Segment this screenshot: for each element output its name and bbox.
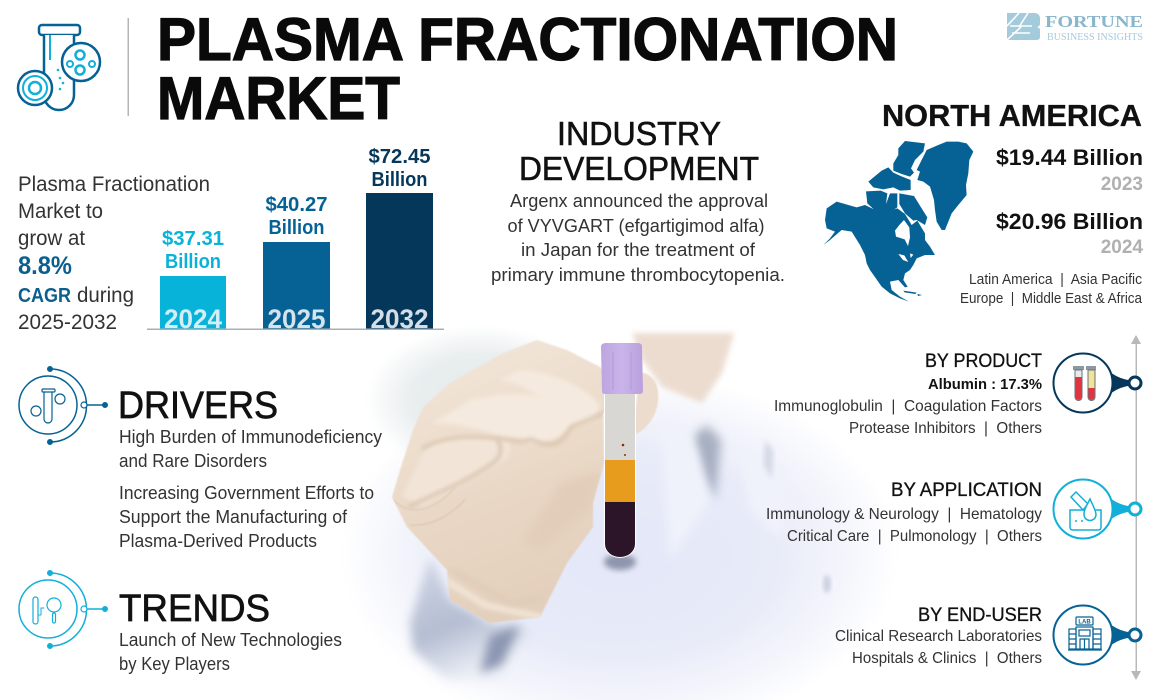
bar 2025: $40.27 bbox=[266, 194, 328, 216]
north america heading and values: NORTH AMERICA bbox=[882, 98, 1142, 133]
by end-user text: Hospitals & Clinics | Others bbox=[852, 650, 1042, 667]
by product text: BY PRODUCT bbox=[925, 351, 1042, 372]
header divider bbox=[128, 18, 129, 116]
bar 2032 bbox=[366, 146, 433, 334]
growth text block: Market to bbox=[18, 200, 103, 223]
by product text bbox=[774, 351, 1042, 437]
by application text: BY APPLICATION bbox=[891, 480, 1042, 501]
growth text block: during bbox=[77, 284, 134, 307]
drivers text bbox=[119, 427, 382, 551]
industry development: Argenx announced the approval bbox=[510, 191, 768, 211]
by product text: Immunoglobulin | Coagulation Factors bbox=[774, 398, 1042, 415]
growth text block: CAGR bbox=[18, 285, 71, 307]
by end-user text: BY END-USER bbox=[918, 605, 1042, 626]
north america heading and values bbox=[882, 98, 1143, 307]
north america heading and values: Latin America | Asia Pacific bbox=[969, 272, 1142, 288]
trends text bbox=[119, 630, 342, 674]
logo: Fortune Business Insights: FORTUNE bbox=[1045, 12, 1143, 31]
drivers text: High Burden of Immunodeficiency bbox=[119, 427, 382, 447]
icon: dropper and dish pin bbox=[1054, 480, 1141, 538]
by product text: Protease Inhibitors | Others bbox=[849, 420, 1042, 437]
logo: Fortune Business Insights bbox=[1007, 12, 1143, 43]
blood collection tube bbox=[601, 343, 643, 570]
north america heading and values: 2024 bbox=[1101, 237, 1143, 258]
title bbox=[157, 6, 898, 132]
title: MARKET bbox=[157, 65, 400, 132]
industry development: INDUSTRY bbox=[557, 115, 721, 152]
trends text: Launch of New Technologies bbox=[119, 630, 342, 650]
by end-user text: Clinical Research Laboratories bbox=[835, 628, 1042, 645]
growth text block: grow at bbox=[18, 227, 85, 250]
by application text: Critical Care | Pulmonology | Others bbox=[787, 528, 1042, 545]
industry development bbox=[491, 115, 785, 285]
growth text block: Plasma Fractionation bbox=[18, 173, 210, 196]
by product text: Albumin : 17.3% bbox=[928, 376, 1042, 393]
north america heading and values: Europe | Middle East & Africa bbox=[960, 291, 1143, 307]
icon: drivers bbox=[19, 366, 108, 444]
by end-user text bbox=[835, 605, 1042, 667]
bar 2032: 2032 bbox=[370, 304, 428, 334]
north america heading and values: $19.44 Billion bbox=[996, 145, 1143, 170]
trends text: by Key Players bbox=[119, 654, 230, 674]
icon: trends bbox=[19, 570, 108, 648]
drivers text: and Rare Disorders bbox=[119, 451, 267, 471]
icon: laboratory building pin: LAB bbox=[1078, 620, 1091, 626]
bar 2024 bbox=[160, 228, 226, 334]
growth text block: 8.8% bbox=[18, 252, 72, 280]
bar 2025: 2025 bbox=[268, 304, 326, 334]
bar 2025 bbox=[263, 194, 330, 334]
heading: trends: TRENDS bbox=[119, 588, 270, 630]
segment axis arrow bbox=[1131, 335, 1141, 680]
icon: test tube with petri dishes bbox=[18, 25, 100, 110]
north america heading and values: $20.96 Billion bbox=[996, 209, 1143, 234]
heading: drivers: DRIVERS bbox=[118, 385, 278, 427]
drivers text: Plasma-Derived Products bbox=[119, 531, 317, 551]
bar 2024: Billion bbox=[165, 251, 221, 273]
bar 2024: $37.31 bbox=[162, 228, 224, 250]
by application text bbox=[766, 480, 1042, 545]
bar 2024: 2024 bbox=[164, 304, 222, 334]
growth text block bbox=[18, 173, 210, 334]
photo: gloved hand holding a plasma tube bbox=[381, 330, 860, 700]
drivers text: Support the Manufacturing of bbox=[119, 507, 348, 527]
bar 2025: Billion bbox=[268, 217, 324, 239]
growth text block: 2025-2032 bbox=[18, 311, 117, 334]
north america heading and values: 2023 bbox=[1101, 174, 1143, 195]
bar 2032: Billion bbox=[372, 169, 428, 191]
by application text: Immunology & Neurology | Hematology bbox=[766, 506, 1042, 523]
map: North America bbox=[823, 141, 973, 302]
drivers text: Increasing Government Efforts to bbox=[119, 483, 374, 503]
industry development: DEVELOPMENT bbox=[519, 150, 759, 187]
icon: blood tubes pin bbox=[1054, 354, 1141, 412]
icon: laboratory building pin bbox=[1054, 606, 1141, 664]
title: PLASMA FRACTIONATION bbox=[157, 6, 898, 73]
coat background bbox=[340, 325, 900, 700]
gloved hand bbox=[392, 340, 658, 623]
logo: Fortune Business Insights: BUSINESS INSIGHTS bbox=[1047, 32, 1143, 43]
industry development: primary immune thrombocytopenia. bbox=[491, 265, 785, 285]
bar chart: market size bbox=[147, 146, 444, 334]
industry development: of VYVGART (efgartigimod alfa) bbox=[508, 216, 764, 236]
industry development: in Japan for the treatment of bbox=[521, 240, 756, 260]
bar 2032: $72.45 bbox=[368, 146, 430, 168]
